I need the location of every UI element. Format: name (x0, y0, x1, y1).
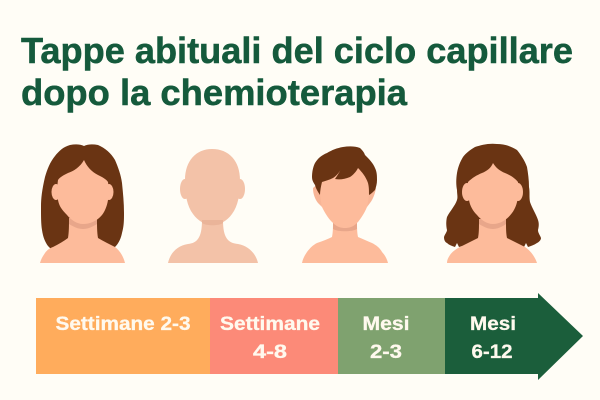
timeline arrow (36, 293, 583, 380)
figure: regrown wavy hair (444, 144, 541, 263)
segment: settimane 2-3: Settimane 2-3 (56, 314, 190, 335)
title (21, 30, 573, 113)
segment: mesi 2-3 (338, 298, 445, 374)
title: dopo la chemioterapia (21, 72, 408, 113)
segment: mesi 6-12 with arrowhead: Mesi (470, 314, 516, 335)
segment: mesi 2-3: 2-3 (370, 342, 402, 363)
segment: settimane 4-8 (210, 298, 338, 374)
figure: hair loss, bald head (168, 149, 258, 263)
segment: mesi 6-12 with arrowhead (445, 293, 583, 380)
segment: mesi 6-12 with arrowhead: 6-12 (472, 342, 512, 363)
segment: settimane 4-8: 4-8 (253, 342, 287, 363)
segment: settimane 2-3 (36, 298, 210, 374)
title: Tappe abituali del ciclo capillare (21, 30, 573, 71)
segment: settimane 4-8: Settimane (220, 314, 320, 335)
figure: short regrowing hair (302, 146, 388, 263)
segment: mesi 2-3: Mesi (362, 314, 410, 335)
figure: long hair before treatment (40, 144, 125, 263)
